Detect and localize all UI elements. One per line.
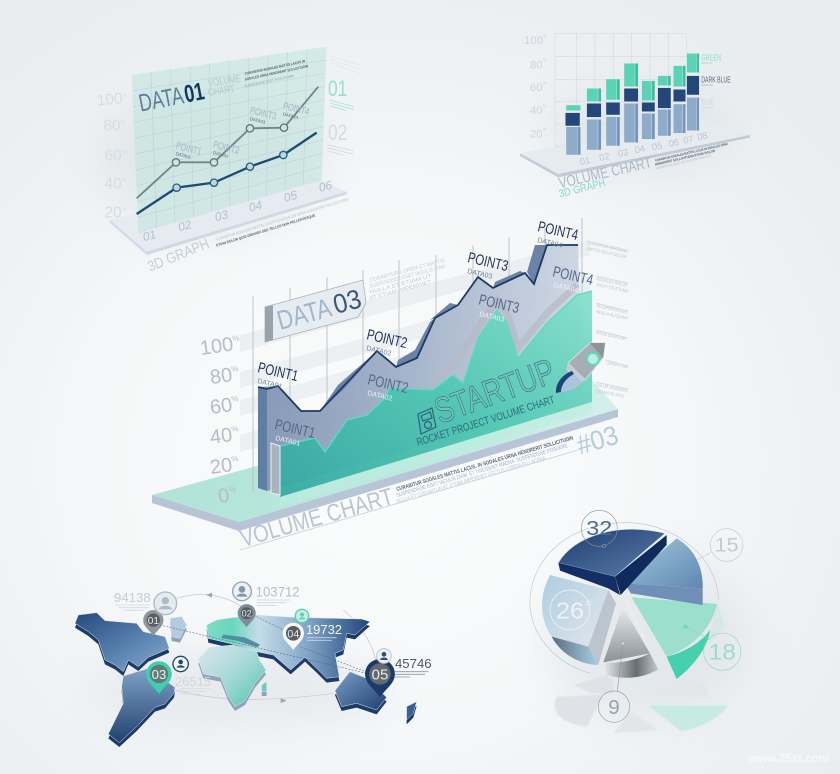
point labels light: POINT4 [551, 263, 595, 289]
legend blue [701, 98, 714, 109]
heading volume chart: CHART [207, 84, 236, 99]
description: HENDRERIT SOLLICITUDIN ETIAM DOLOR [655, 149, 716, 167]
x axis labels [141, 178, 334, 244]
callout 18 [684, 625, 741, 670]
slice 15 [625, 538, 703, 605]
panel: stacked bar chart [520, 33, 750, 200]
panel description: SUSPENDISSE EGET IACULIS DIAM [244, 74, 294, 88]
data 03 label [265, 280, 366, 342]
description: CURABITUR SODALES MATTIS LACUS IN SODALES URNA HENDRERIT SOLLICITUDIN [216, 197, 350, 242]
madagascar [262, 682, 267, 692]
callout 15: 15 [715, 536, 739, 557]
percentage axis: 20 [209, 454, 234, 479]
panel: line chart 3D graph [96, 47, 359, 275]
y axis labels [524, 33, 547, 140]
icon: rocket [556, 343, 605, 393]
y axis labels: 20 [530, 128, 543, 140]
connection lines [160, 617, 370, 673]
legend 02 [327, 120, 353, 155]
callout 9 [598, 641, 630, 722]
mediterranean [221, 635, 260, 647]
panel description: CURABITUR SODALES MATTIS LACUS IN [244, 59, 306, 76]
x axis labels: 05 [282, 188, 299, 205]
x axis labels: 01 [141, 227, 158, 244]
heading volume chart: VOLUME [207, 74, 241, 90]
description behind chart: NULLA ET ETIAM UT [369, 273, 433, 296]
line series 01 [137, 87, 318, 198]
slice 32 [558, 529, 667, 595]
point labels light: DATA03 [479, 311, 505, 324]
data 03 label: 03 [330, 284, 365, 320]
heading volume chart: VOLUME CHART [557, 154, 654, 192]
y axis labels: 40 [105, 175, 122, 192]
stat 103712: 103712 [256, 584, 300, 600]
point labels dark: DATA01 [257, 378, 283, 391]
right side notes: SUSPENDISSE [596, 303, 628, 315]
greenland [170, 617, 187, 638]
new zealand [407, 702, 417, 720]
heading DATA01: 01 [182, 78, 207, 109]
pin 03 [146, 661, 172, 694]
percentage axis: % [231, 364, 239, 374]
floor platform [110, 173, 347, 255]
startup heading: STARTUP [429, 350, 560, 432]
gray side cap [271, 443, 280, 495]
pin 02: 02 [242, 609, 252, 619]
legend dark blue: DATA 02 [701, 83, 713, 87]
point labels: POINT3 [249, 106, 278, 123]
x axis labels: 04 [634, 143, 646, 155]
long description: SUSPENDISSE EGET IACULIS DIAM. ET TINCIDUNT MAGNA. SUSPENDISSE POSUERE [396, 443, 569, 499]
panel grid [132, 49, 326, 228]
right side notes [587, 240, 629, 399]
y axis labels: 80 [103, 118, 120, 135]
percentage axis: 60 [209, 394, 234, 419]
legend 01 [328, 76, 354, 111]
legend dark blue [701, 75, 731, 87]
stat 19732: 19732 [306, 622, 342, 637]
y axis labels: 60 [530, 82, 543, 94]
front glass strip [280, 402, 592, 507]
y axis labels: 100 [524, 35, 543, 47]
base platform [152, 380, 618, 531]
x axis labels [579, 130, 709, 167]
y axis labels: % [543, 80, 547, 85]
x axis labels: 02 [176, 217, 193, 234]
percentage axis: % [232, 334, 240, 343]
bar 02 [587, 88, 601, 150]
x axis labels: 05 [651, 140, 663, 152]
point labels dark: DATA03 [467, 268, 493, 281]
floor shadows [554, 675, 728, 733]
slice 26 [542, 575, 616, 665]
map extrusion light [170, 621, 267, 711]
left cap [258, 387, 267, 491]
panel: main volume chart [152, 218, 629, 553]
y axis labels: % [122, 207, 127, 213]
x axis labels: 04 [247, 198, 264, 215]
right side notes: IPSUM DIGNISSIM [596, 330, 626, 341]
ghost percentage bands [240, 240, 590, 452]
description behind chart [369, 258, 446, 302]
teal area series [271, 291, 592, 507]
point labels: DATA01 [175, 151, 192, 160]
x axis labels: 06 [668, 137, 680, 149]
legend green [701, 54, 721, 65]
point labels: POINT1 [175, 141, 203, 158]
bar 01 [565, 105, 581, 155]
bar 04 [624, 63, 638, 143]
point labels dark: POINT3 [466, 249, 510, 275]
point labels light [273, 263, 595, 448]
y axis labels: 60 [105, 148, 122, 165]
point labels: POINT4 [282, 101, 311, 118]
right side notes: MATTIS SED ET DOLOR [587, 246, 628, 259]
icon: user 05 [377, 649, 391, 663]
legend green: GREEN [701, 54, 721, 63]
soft ambient shadows [90, 90, 750, 725]
x axis labels: 06 [317, 178, 334, 195]
point labels light: POINT1 [273, 416, 317, 442]
pin 05: 05 [372, 667, 388, 684]
australia [335, 672, 387, 710]
continents [75, 613, 417, 743]
y axis labels [96, 90, 128, 221]
point labels dark: POINT2 [365, 326, 409, 352]
right side notes: LOREM ETIAM [606, 360, 629, 370]
y axis labels: % [543, 127, 547, 132]
heading volume chart [207, 74, 241, 99]
line series 02 [137, 133, 317, 214]
point labels dark [256, 218, 580, 391]
pin 01 [143, 610, 163, 636]
right side notes: NULLA ALIQUAM [596, 309, 628, 321]
hash 03: #03 [573, 420, 622, 461]
legend dark blue: DARK BLUE [701, 75, 731, 84]
eurasia [207, 615, 370, 678]
right side notes: CURABITUR IMPERDIET [587, 240, 629, 254]
point labels: POINT2 [212, 140, 241, 157]
y axis labels: % [122, 150, 127, 156]
legend 02: 02 [328, 120, 347, 145]
watermark: www.25xt.com [748, 751, 829, 765]
callout 26: 26 [556, 597, 584, 623]
bar 08 [687, 53, 699, 131]
callout 15 [697, 529, 743, 561]
slice 18 [632, 597, 725, 679]
heading 3D graph: 3D GRAPH [558, 177, 607, 200]
callout 32: 32 [586, 517, 612, 540]
gray shadow of teal series [433, 285, 577, 380]
description behind chart: AT ETIAM IMPERDIET [369, 279, 433, 302]
panel description [244, 59, 309, 88]
panel: pie chart [530, 510, 743, 733]
south america [108, 668, 175, 743]
grid [555, 33, 687, 147]
description: SUSPENDISSE EGET IACULIS DIAM TINCIDUNT [655, 154, 712, 171]
x axis labels: 07 [682, 134, 695, 146]
percentage axis: % [231, 454, 239, 464]
y axis labels: 100 [96, 90, 123, 110]
pin 01: 01 [148, 616, 159, 627]
percentage axis: % [231, 424, 239, 434]
x axis labels: 03 [617, 147, 629, 159]
point labels light: POINT2 [366, 371, 410, 397]
icon: floppy [418, 408, 436, 434]
heading underline [240, 450, 578, 550]
point labels dark: DATA04 [537, 237, 563, 250]
point labels: DATA02 [212, 150, 229, 159]
right side notes: DOLOR VENENATIS [596, 382, 628, 394]
map extrusion [75, 617, 417, 747]
point labels light: POINT3 [477, 291, 521, 317]
pin 04 [283, 623, 304, 650]
stat 45746: 45746 [395, 656, 432, 671]
point labels dark: DATA02 [366, 345, 392, 358]
legend blue: BLUE [701, 98, 714, 107]
startup subtitle: ROCKET PROJECT VOLUME CHART [415, 394, 556, 449]
point labels light: DATA01 [275, 435, 301, 448]
ridge line [258, 245, 578, 411]
y axis labels: 40 [530, 105, 543, 117]
point labels dark: POINT4 [536, 218, 580, 244]
stat 94138: 94138 [114, 590, 151, 605]
bar 05 [642, 81, 655, 139]
stat 26515: 26515 [175, 674, 211, 689]
y axis labels: 80 [530, 59, 543, 71]
long description: CURABITUR SODALES MATTIS LACUS. IN SODALES URNA HENDRERIT SOLLICITUDIN [396, 436, 574, 493]
slice 9 [603, 598, 658, 678]
icon: user 04 [295, 609, 309, 623]
x axis labels: 01 [579, 155, 591, 167]
point labels light: DATA04 [553, 282, 579, 295]
north america [75, 613, 169, 672]
callout 26 [550, 590, 590, 630]
icon: user 02 [233, 582, 251, 601]
icon: user 01 [154, 592, 177, 615]
y axis labels: % [120, 120, 125, 126]
long description: NULLA ET CURABITUR AT. ETIAM IMPERDIET LECTUS LOREM EU LACINIA [396, 456, 547, 505]
y axis labels: % [543, 58, 547, 63]
description: ETIAM DOLOR QUIS GRAVIDA SED TELLUS NON PELLENTESQUE [216, 213, 316, 248]
pin 02 [238, 604, 256, 627]
legend blue: DATA 03 [701, 105, 713, 109]
x axis labels: 08 [696, 130, 709, 142]
heading 3D GRAPH: 3D GRAPH [145, 236, 212, 275]
description behind chart: SUSPENDISSE EGET IACULIS DIAM [369, 264, 446, 290]
heading DATA01: DATA [137, 82, 186, 118]
right side notes: SODALES DOLOR [596, 276, 629, 288]
vertical gridlines [253, 218, 582, 492]
panel description: SODALES URNA HENDRERIT SOLLICITUDIN [244, 64, 309, 82]
bars [565, 53, 699, 155]
right side notes: SAGITTIS ETIAM [596, 282, 628, 294]
ridge shading [320, 245, 547, 411]
point labels [175, 101, 311, 160]
legend green: DATA 01 [701, 61, 713, 65]
percentage axis: % [228, 485, 236, 495]
percentage axis [199, 333, 242, 508]
percentage axis: 0 [217, 485, 231, 508]
bar 07 [673, 66, 686, 133]
legend 01: 01 [328, 76, 347, 101]
route lines [175, 595, 377, 699]
y axis labels: % [122, 178, 127, 184]
y axis labels: 20 [105, 204, 122, 221]
x axis labels: 02 [598, 151, 611, 163]
percentage axis: 40 [209, 424, 234, 449]
percentage axis: 100 [199, 334, 235, 360]
bar 03 [606, 79, 620, 146]
pin 05 [365, 659, 395, 697]
y axis labels: % [543, 33, 547, 38]
percentage axis: 80 [209, 364, 234, 389]
dark area series [258, 245, 582, 491]
top right note [330, 56, 359, 73]
point labels: DATA03 [249, 116, 266, 125]
pin 04: 04 [287, 628, 299, 640]
callout 9: 9 [608, 696, 620, 719]
outer orbit ring [530, 523, 718, 673]
glass data panel [132, 47, 327, 233]
callout 18: 18 [709, 639, 736, 664]
description: CURABITUR SODALES MATTIS LACUS IN SODALES URNA [655, 142, 729, 163]
point labels dark: POINT1 [256, 359, 300, 385]
right side notes: QUAM IN NISI [596, 388, 624, 399]
point labels light: DATA02 [367, 390, 393, 403]
percentage axis: % [231, 394, 239, 404]
africa [198, 645, 266, 707]
panel: world map [75, 582, 432, 747]
bar 06 [658, 76, 671, 136]
data 03 label: DATA [274, 293, 335, 336]
volume chart heading: VOLUME CHART [237, 483, 397, 553]
floor platform [520, 120, 750, 177]
y axis labels: % [543, 103, 547, 108]
pin 03: 03 [152, 667, 166, 682]
y axis labels: % [122, 92, 127, 98]
description behind chart: CURABITUR LOREM ET MATTIS [369, 258, 446, 284]
icon: user 03 [173, 656, 188, 672]
callout 32 [581, 510, 617, 548]
point labels: DATA04 [282, 111, 299, 120]
x axis labels: 03 [213, 207, 230, 224]
right side divider lines [587, 241, 628, 389]
arrow markers [206, 593, 287, 703]
